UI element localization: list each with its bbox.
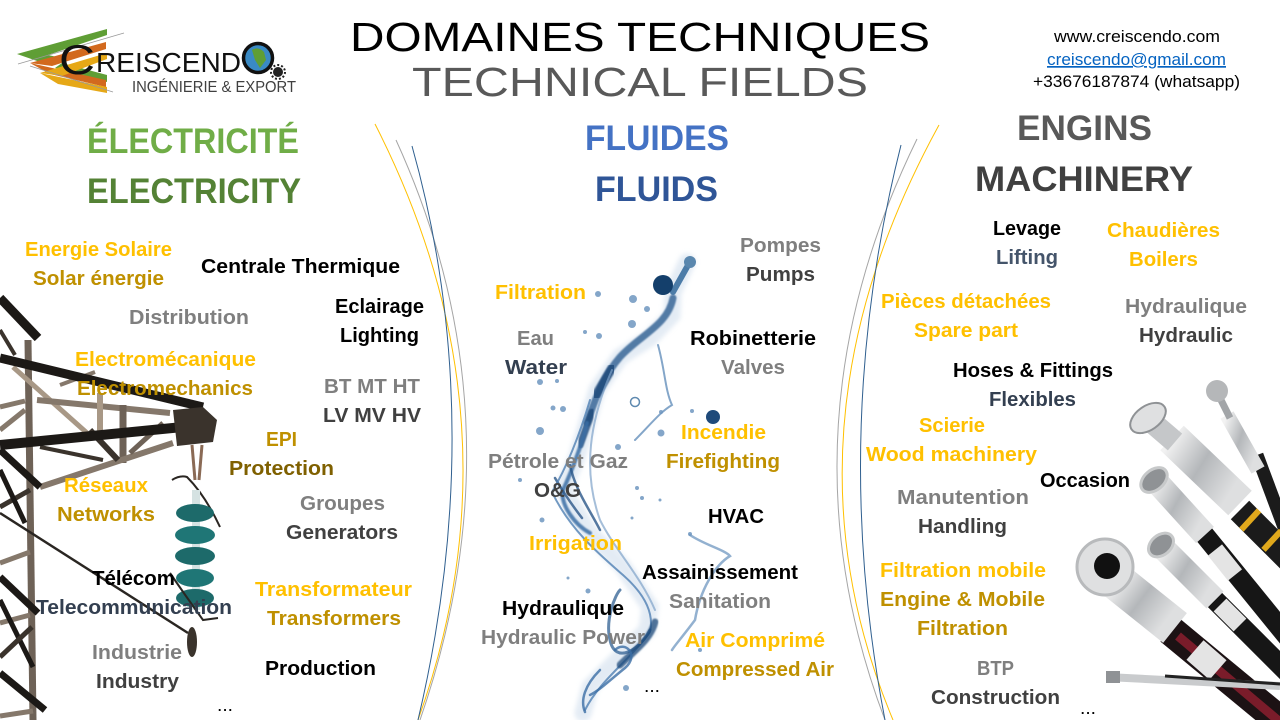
labels: electricity column: Industry — [96, 671, 180, 693]
left curved separators — [375, 124, 467, 720]
labels: fluids column: Firefighting — [666, 451, 780, 473]
heading: machinery: ENGINS — [1017, 109, 1152, 148]
labels: fluids column: Pompes — [740, 235, 821, 257]
labels: fluids column — [481, 235, 834, 696]
labels: machinery column: Filtration mobile — [880, 560, 1046, 582]
labels: electricity column: Transformers — [267, 608, 401, 630]
labels: fluids column: HVAC — [708, 506, 764, 528]
photo: pylon with insulators — [0, 298, 220, 720]
labels: machinery column: ... — [1080, 698, 1096, 718]
labels: electricity column: Electromécanique — [75, 349, 256, 371]
labels: machinery column: Wood machinery — [866, 444, 1038, 466]
labels: machinery column: BTP — [977, 658, 1014, 680]
labels: machinery column — [866, 218, 1247, 718]
labels: electricity column: Solar énergie — [33, 268, 164, 290]
logo: Creiscendo: INGÉNIERIE & EXPORT — [132, 77, 296, 96]
labels: electricity column: Protection — [229, 458, 334, 480]
labels: machinery column: Levage — [993, 218, 1061, 240]
labels: fluids column: Air Comprimé — [685, 630, 825, 652]
contact details: +33676187874 (whatsapp) — [1033, 72, 1240, 91]
labels: electricity column: EPI — [266, 429, 297, 451]
labels: fluids column: Filtration — [495, 282, 586, 304]
labels: machinery column: Chaudières — [1107, 220, 1220, 242]
labels: fluids column: Pumps — [746, 264, 815, 286]
heading: fluids: FLUIDES — [585, 119, 729, 158]
labels: machinery column: Flexibles — [989, 389, 1076, 411]
labels: electricity column: Distribution — [129, 307, 249, 329]
labels: machinery column: Hydraulique — [1125, 296, 1247, 318]
insulator string — [170, 445, 220, 657]
labels: fluids column: Hydraulic Power — [481, 627, 645, 649]
labels: machinery column: Boilers — [1129, 249, 1198, 271]
labels: machinery column: Scierie — [919, 415, 985, 437]
labels: machinery column: Hydraulic — [1139, 325, 1233, 347]
labels: fluids column: O&G — [534, 480, 581, 502]
labels: fluids column: Valves — [721, 357, 785, 379]
labels: fluids column: Compressed Air — [676, 659, 834, 681]
labels: machinery column: Lifting — [996, 247, 1058, 269]
labels: electricity column: BT MT HT — [324, 376, 420, 398]
labels: fluids column: Pétrole et Gaz — [488, 451, 628, 473]
logo: Creiscendo: REISCEND — [96, 47, 241, 78]
labels: electricity column: Lighting — [340, 325, 419, 347]
labels: fluids column: Sanitation — [669, 591, 771, 613]
labels: electricity column: Télécom — [92, 568, 175, 590]
labels: electricity column: ... — [217, 695, 233, 715]
labels: fluids column: Water — [505, 357, 567, 379]
labels: fluids column: Assainissement — [642, 562, 798, 584]
logo: Creiscendo — [17, 29, 296, 96]
labels: electricity column: Telecommunication — [36, 597, 232, 619]
photo: hydraulic hoses — [1077, 380, 1280, 720]
labels: machinery column: Manutention — [897, 487, 1029, 509]
labels: electricity column: Transformateur — [255, 579, 412, 601]
labels: electricity column: Energie Solaire — [25, 239, 172, 261]
heading: machinery: MACHINERY — [975, 160, 1193, 199]
labels: fluids column: Hydraulique — [502, 598, 624, 620]
heading: fluids: FLUIDS — [595, 170, 718, 209]
labels: machinery column: Engine & Mobile — [880, 589, 1045, 611]
contact details: creiscendo@gmail.com — [1047, 50, 1226, 69]
labels: machinery column: Hoses & Fittings — [953, 360, 1113, 382]
contact details — [1033, 27, 1240, 91]
labels: electricity column: LV MV HV — [323, 405, 422, 427]
labels: electricity column: Production — [265, 658, 376, 680]
right curved separators — [837, 125, 939, 720]
heading: electricity — [87, 121, 301, 211]
labels: fluids column: Robinetterie — [690, 328, 816, 350]
labels: electricity column: Industrie — [92, 642, 182, 664]
labels: electricity column: Centrale Thermique — [201, 256, 400, 278]
labels: fluids column: Irrigation — [529, 533, 622, 555]
labels: machinery column: Spare part — [914, 320, 1018, 342]
labels: fluids column: Incendie — [681, 422, 766, 444]
labels: electricity column — [25, 239, 424, 715]
title: TECHNICAL FIELDS — [412, 59, 868, 105]
labels: electricity column: Generators — [286, 522, 398, 544]
title — [350, 14, 930, 105]
labels: fluids column: ... — [644, 676, 660, 696]
labels: electricity column: Groupes — [300, 493, 385, 515]
labels: electricity column: Réseaux — [64, 475, 148, 497]
labels: machinery column: Pièces détachées — [881, 291, 1051, 313]
contact details: www.creiscendo.com — [1053, 27, 1220, 46]
labels: machinery column: Handling — [918, 516, 1007, 538]
labels: machinery column: Construction — [931, 687, 1060, 709]
heading: fluids — [585, 119, 729, 209]
labels: electricity column: Eclairage — [335, 296, 424, 318]
labels: machinery column: Filtration — [917, 618, 1008, 640]
heading: machinery — [975, 109, 1193, 199]
labels: fluids column: Eau — [517, 328, 554, 350]
labels: machinery column: Occasion — [1040, 470, 1130, 492]
heading: electricity: ELECTRICITY — [87, 172, 301, 211]
heading: electricity: ÉLECTRICITÉ — [87, 121, 299, 161]
logo: Creiscendo: C — [59, 36, 95, 83]
labels: electricity column: Electromechanics — [77, 378, 253, 400]
title: DOMAINES TECHNIQUES — [350, 14, 930, 60]
photo: water splash — [518, 256, 730, 713]
labels: electricity column: Networks — [57, 504, 155, 526]
